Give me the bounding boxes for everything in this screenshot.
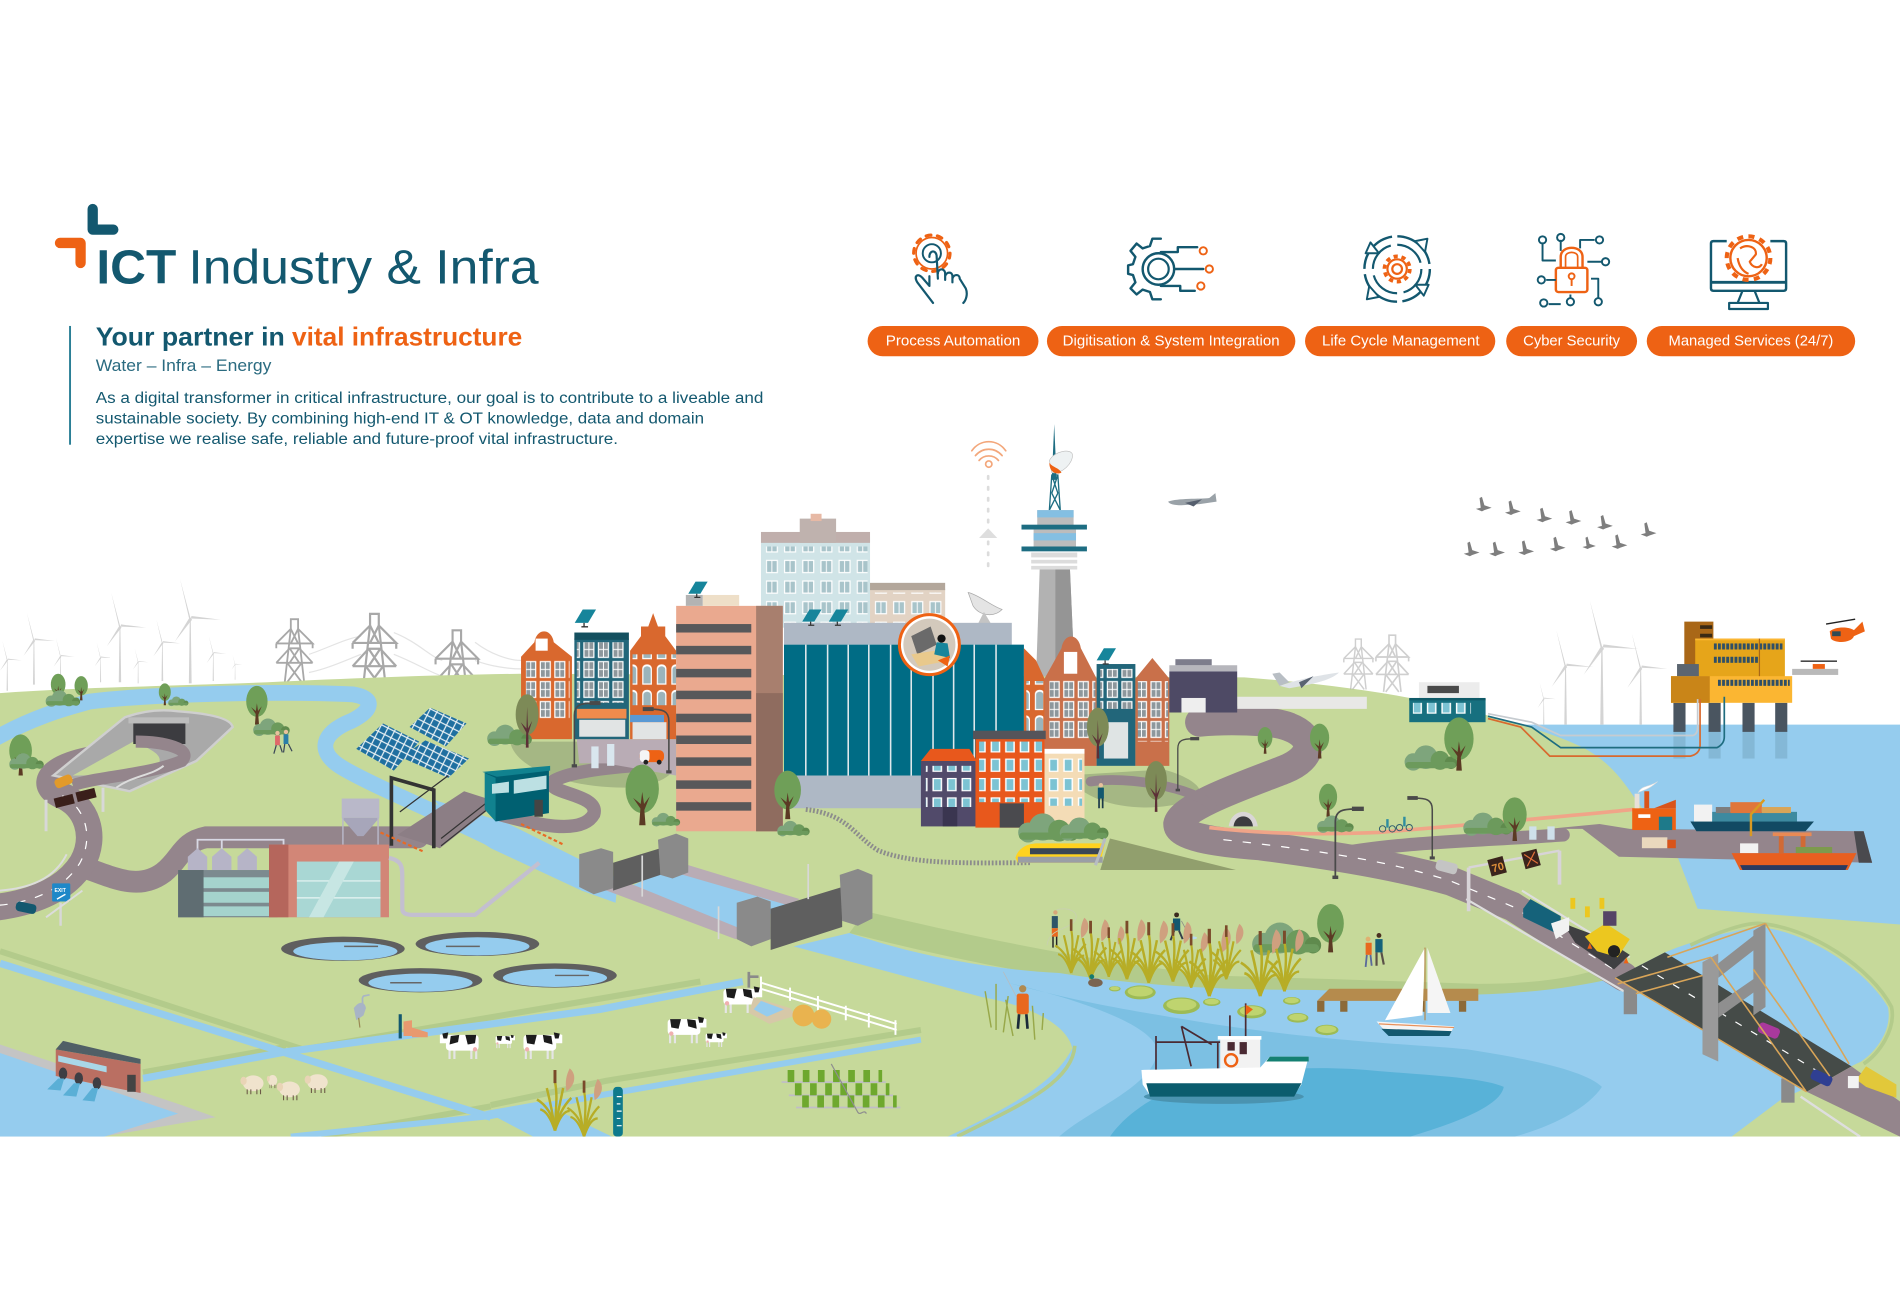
body copy: sustainable society. By combining high-end IT & OT knowledge, data and domain: [96, 410, 704, 428]
water tank: [342, 799, 379, 846]
tall orange house: [1045, 636, 1097, 766]
dotted uplink: [987, 476, 989, 570]
orange factory: [1632, 782, 1676, 830]
heron: [354, 995, 370, 1028]
main hall: [269, 845, 389, 917]
field banks: [0, 951, 921, 1137]
narrow orange house: [1024, 648, 1045, 757]
ditches: [0, 963, 921, 1137]
hose: [831, 1064, 866, 1114]
logo wordmark: Industry & Infra: [188, 241, 539, 295]
city loop and motorway: [1178, 721, 1624, 977]
wifi signal with rising arrow: [972, 442, 1006, 570]
apartment tower: [761, 514, 870, 628]
dark office: [1169, 659, 1237, 713]
fishing boat: [1141, 1003, 1309, 1104]
irrigation lines: [782, 1082, 900, 1108]
motorway right furniture: [1435, 849, 1630, 991]
service: digitisation: [1047, 239, 1295, 356]
bay rim: [1690, 923, 1892, 1064]
tap: [749, 972, 759, 988]
clarifier tanks: [281, 932, 617, 992]
tower shaft: [1036, 570, 1075, 679]
plaza: [577, 739, 676, 776]
solar park: [356, 708, 469, 778]
traffic cones: [1587, 943, 1629, 963]
stepped gable house: [630, 613, 676, 739]
canal lower widening: [434, 800, 618, 903]
water level gauge: [613, 1087, 623, 1137]
main teal building: [784, 623, 1024, 808]
service: process automation: [868, 235, 1038, 356]
road network right: [1091, 721, 1624, 977]
headline: [96, 323, 522, 351]
logo: [60, 209, 539, 295]
guard rails: [0, 766, 164, 917]
antenna spire: [1052, 424, 1057, 480]
tunnel entrance: [53, 710, 233, 791]
road to control house: [499, 763, 670, 827]
oil platform: [1671, 622, 1838, 759]
crop rows: [782, 1064, 900, 1114]
headline: Your partner in: [96, 323, 285, 351]
water sampler person: [1171, 912, 1197, 940]
railway and train: [806, 809, 1105, 865]
pylons right: [1344, 635, 1409, 692]
icon: monitor and wrench gear: [1711, 236, 1786, 309]
reeds bottom left with gauge: [537, 1068, 623, 1137]
figure: [1003, 972, 1029, 1029]
matrix sign gantry: [46, 788, 103, 831]
pill label: [1305, 326, 1495, 356]
communication tower: [1021, 424, 1087, 679]
left bank rim: [957, 1046, 1075, 1137]
plants: [788, 1076, 897, 1101]
helicopter: [1826, 619, 1865, 642]
pill label: Managed Services (24/7): [1669, 333, 1833, 349]
boat shadow: [1144, 1089, 1304, 1104]
navigation lock: [579, 834, 872, 950]
badge: control room operator: [898, 613, 961, 676]
lower gate: [737, 869, 872, 950]
rig helipad boom: [1792, 660, 1838, 675]
geese flock: [1464, 497, 1656, 556]
hay bales: [792, 1005, 831, 1029]
polder ditches and field banks: [0, 951, 921, 1137]
silos: [188, 848, 257, 870]
orange gable house: [521, 631, 572, 739]
lattice mast: [1049, 475, 1060, 510]
hull: [1141, 1057, 1309, 1097]
lock quays: [594, 864, 800, 939]
power lines: [309, 633, 521, 676]
canal upstream: [0, 693, 580, 877]
bottom margin mask: [0, 1137, 1900, 1300]
body copy: [96, 389, 763, 448]
cables: [1618, 923, 1849, 1091]
sea: [1503, 725, 1900, 967]
lock chamber: [616, 870, 789, 932]
icon: padlock and circuit: [1538, 234, 1609, 307]
barriers: [380, 824, 563, 852]
logo wordmark: ICT: [96, 241, 177, 295]
subheading: Water – Infra – Energy: [96, 356, 272, 375]
EV chargers: [1529, 826, 1555, 840]
port quay: [1549, 824, 1872, 863]
bank shading: [849, 911, 1624, 1001]
pill label: Process Automation: [886, 333, 1020, 349]
tunnel small: [1229, 812, 1258, 826]
street lamps right: [1176, 738, 1435, 877]
matrix sign gantry: 70: [1491, 860, 1506, 875]
bridge deck: [1615, 952, 1852, 1092]
rig hull: [1671, 622, 1792, 703]
pill label: Life Cycle Management: [1322, 333, 1480, 349]
pointed house: [1135, 658, 1169, 766]
silo pipework: [198, 840, 284, 854]
city trees: [487, 694, 1167, 842]
white fence: [761, 977, 897, 1035]
back leg: [1718, 923, 1765, 1018]
person casting rod: [1047, 909, 1076, 948]
train: [1015, 839, 1105, 865]
upper gate: [579, 834, 688, 894]
shallow water: [794, 927, 1889, 1137]
city centre: [487, 582, 1237, 842]
water jets: [47, 1078, 98, 1101]
effluent pipe: [389, 858, 539, 915]
motorway signs left: [0, 766, 164, 926]
exit sign: [52, 883, 70, 926]
track: [806, 809, 1030, 863]
logo mark: [60, 209, 113, 263]
city feeder: [1091, 780, 1212, 806]
runway: [1237, 697, 1367, 709]
salmon cycle path: [1209, 809, 1633, 834]
far wind turbines left: [0, 579, 242, 691]
water: main river and bay: [794, 911, 1892, 1137]
asphalt patch: [1563, 923, 1630, 969]
jetty: [1317, 989, 1478, 1012]
station: [1409, 682, 1486, 722]
tower head: [1021, 510, 1087, 570]
street lamps by plaza: [572, 702, 672, 772]
satellite dish: [968, 593, 1002, 624]
chargers plaza: [591, 744, 614, 768]
railings: [400, 776, 498, 846]
far pale buildings: [761, 514, 945, 628]
teal narrow house: [1097, 664, 1135, 766]
suspension bridge: [1615, 923, 1900, 1137]
yellow truck: [1848, 1066, 1896, 1098]
road roller: [1585, 911, 1630, 957]
water treatment plant: [178, 799, 539, 917]
water trough: [749, 997, 796, 1024]
trees right: [1252, 717, 1527, 956]
bridge piers: [1624, 988, 1795, 1103]
cables: [1488, 697, 1724, 756]
teal house: [574, 633, 629, 739]
lily pads: [1109, 985, 1338, 1035]
rigging: [1156, 1003, 1246, 1071]
departing plane: [1272, 673, 1339, 688]
cargo vessel: [1732, 832, 1856, 870]
fisherman: [985, 972, 1043, 1040]
parabolic dish: [1049, 451, 1072, 473]
icon: gear and pointing hand: [914, 235, 967, 303]
purple house: [921, 749, 977, 826]
sheep: [240, 1074, 328, 1100]
red-orange apartments: [973, 731, 1046, 828]
reed belt: [1055, 918, 1304, 996]
front leg: [1702, 954, 1718, 1061]
pill label: [1047, 326, 1295, 356]
pump station: [47, 1041, 141, 1101]
silver car: [1435, 859, 1459, 875]
sailboat: [1377, 948, 1454, 1036]
trough and fence: [749, 972, 897, 1035]
deck edge: [1615, 978, 1807, 1092]
delivery truck: [1642, 837, 1676, 848]
left hall: [178, 870, 277, 917]
lane markings: [1224, 840, 1618, 972]
pill label: [868, 326, 1038, 356]
maintenance worker: [1098, 783, 1104, 808]
pill label: Cyber Security: [1523, 333, 1621, 349]
coastal basin: [0, 1045, 216, 1137]
body copy: expertise we realise safe, reliable and future-proof vital infrastructure.: [96, 430, 618, 448]
service: cyber security: [1506, 234, 1637, 356]
pill label: Digitisation & System Integration: [1063, 333, 1280, 349]
motorway loop: [0, 742, 194, 908]
lane markings: [0, 795, 87, 905]
offshore wind turbines: [1538, 600, 1667, 725]
matrix sign gantry: [1469, 849, 1560, 911]
rig leg reflections: [1673, 731, 1787, 759]
control house: [482, 766, 550, 822]
icon: gear with circuits: [1128, 239, 1213, 299]
guard rails: [1466, 891, 1630, 991]
branch to port: [1330, 835, 1563, 855]
electric car: [640, 750, 664, 765]
mid water: [1008, 983, 1602, 1137]
deck: [397, 791, 498, 848]
beige row: [870, 583, 945, 628]
walking couple: [1366, 933, 1384, 967]
pill label: [1647, 326, 1855, 356]
deck beyond: [1807, 1066, 1900, 1137]
cows: [440, 986, 762, 1059]
drawbridge: [380, 776, 563, 852]
lane markings: [1642, 966, 1830, 1078]
headline: vital infrastructure: [292, 323, 522, 351]
bank reeds: [985, 984, 1043, 1040]
right canal houses: [1024, 636, 1237, 766]
frame: [391, 778, 434, 848]
airplane high: [1168, 493, 1217, 507]
sluice gate: [399, 1014, 428, 1038]
factory side road: [85, 837, 418, 882]
joggers: [274, 730, 292, 754]
left canal houses: [521, 610, 676, 739]
ditch junction: [485, 1101, 612, 1137]
reeds: [537, 1068, 602, 1137]
cyclists: [1379, 817, 1412, 832]
lorry: [1523, 899, 1569, 939]
road network left: [0, 742, 418, 908]
foreground buildings: [921, 731, 1085, 828]
car teal: [15, 901, 37, 915]
duck: [1088, 974, 1103, 987]
pylons left: [276, 614, 478, 704]
car orange: [53, 773, 74, 789]
land: [0, 674, 1900, 1137]
service: managed services: [1647, 236, 1855, 356]
outfall pipes: [59, 1068, 101, 1089]
icon: wifi: [972, 442, 1006, 467]
park shading patches: [510, 742, 1236, 870]
exit sign: EXIT: [55, 888, 67, 894]
roof solar panel: [575, 610, 596, 627]
rig legs: [1673, 703, 1787, 732]
service: life cycle management: [1305, 236, 1495, 356]
trees and shrubs left: [9, 674, 290, 776]
sensor poles: [642, 855, 808, 939]
rail lower: [1801, 1097, 1860, 1137]
cream house: [1045, 749, 1085, 824]
intro text block: [69, 323, 763, 448]
icon: circular arrows and gear: [1364, 236, 1430, 302]
substation and subsea cables: [1409, 682, 1724, 756]
cars on bridge: [1757, 1021, 1834, 1087]
airfield: [1237, 673, 1367, 709]
accent rule: [69, 326, 71, 445]
body copy: As a digital transformer in critical infrastructure, our goal is to contribute to a liveable and: [96, 389, 763, 407]
salmon tower: [676, 582, 783, 831]
cabin: [1218, 1036, 1261, 1072]
deep water: [1110, 1068, 1504, 1137]
roof panels: [802, 610, 848, 625]
container ship: [1690, 800, 1814, 836]
road workers: [1570, 898, 1604, 917]
arrow head: [979, 528, 997, 538]
